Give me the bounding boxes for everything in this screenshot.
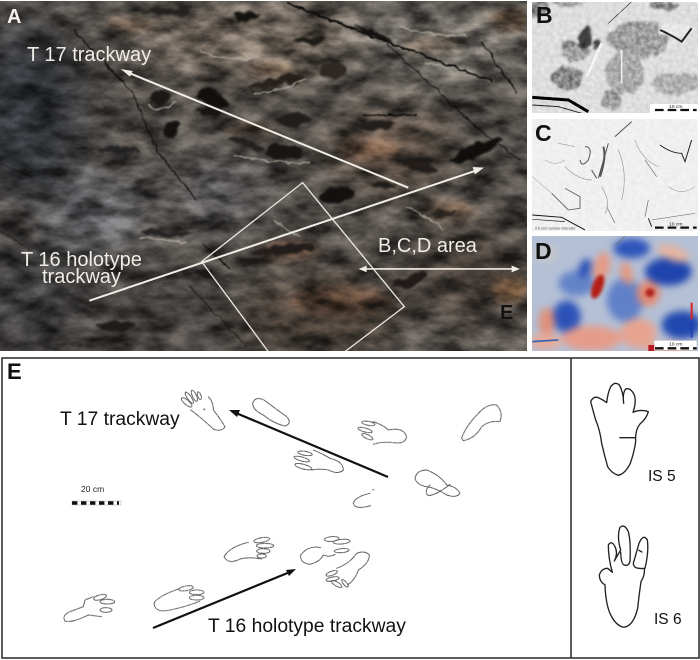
footprint: overlapping pair	[415, 470, 460, 496]
label: T 17 trackway: T 17 trackway	[27, 44, 151, 66]
relief shading	[525, 0, 698, 113]
label: T 16 holotype trackway: T 16 holotype	[21, 249, 142, 271]
relief background	[532, 2, 698, 113]
rock grain texture	[0, 1, 527, 351]
label: A: A	[7, 6, 21, 28]
footprint: T 17 top centre	[357, 420, 407, 444]
arrow: T 16 direction	[153, 569, 296, 628]
arrow: B,C,D area double arrow	[359, 266, 520, 272]
footprint: T 17 first	[180, 389, 225, 430]
label: T 17 trackway map: T 17 trackway	[60, 409, 180, 430]
footprint: T 16 lower middle	[154, 585, 204, 611]
arrow: T 17 direction	[229, 410, 388, 477]
footprint: T 16 lower right	[325, 552, 369, 589]
scale bar and contour note	[535, 222, 697, 230]
footprint: T 17 centre	[293, 450, 343, 472]
label: IS 6: IS 6	[654, 611, 682, 628]
footprint: partial heel	[353, 489, 374, 507]
rock base tone	[0, 1, 527, 351]
label: IS 5: IS 5	[648, 468, 676, 485]
label: E: E	[7, 359, 22, 384]
footprints: right half of trackway map	[293, 405, 501, 589]
label: B,C,D area: B,C,D area	[378, 235, 478, 257]
footprint: T 17 top right	[462, 405, 501, 441]
label: T 16 holotype trackway	[21, 249, 142, 288]
panel D: colour depth map	[528, 236, 700, 354]
rock light and shadow areas	[0, 4, 530, 360]
panel A: rock surface photograph	[0, 1, 530, 360]
scale bar: 20 cm: 20 cm	[81, 484, 104, 494]
footprint outline: IS 5	[591, 383, 648, 475]
contour grain	[532, 119, 698, 231]
label: D: D	[535, 238, 552, 264]
footprint: T 16 upper right	[301, 536, 350, 564]
scale bar and contour note: 10 cm	[669, 221, 683, 227]
depth map background	[532, 236, 698, 351]
footprint: T 16 lower left	[64, 593, 115, 621]
label: T 16 holotype trackway map: T 16 holotype trackway	[208, 616, 406, 637]
pale rims	[140, 27, 467, 243]
footprint: T 17 sole	[253, 398, 289, 426]
rust patches	[105, 10, 530, 314]
label: E on photo: E	[500, 302, 513, 324]
study area rectangle	[202, 183, 404, 352]
arrow: T 17 trackway in photo	[121, 69, 408, 188]
footprint: T 16 upper left	[224, 536, 274, 561]
scale bar: 20 cm	[72, 484, 121, 505]
depth map blobs	[528, 237, 700, 354]
contour background	[532, 119, 698, 231]
panel E: trackway map frame	[2, 358, 699, 658]
relief grain	[532, 2, 698, 113]
scale bar and contour note: 0.5 mm contour intervals	[535, 226, 575, 230]
scale bar: 10 cm	[669, 104, 683, 110]
contour lines	[532, 122, 695, 230]
colour legend and scale bar	[654, 303, 697, 350]
panel B: shaded relief	[525, 0, 698, 113]
label: B: B	[536, 2, 553, 28]
footprint depressions	[97, 8, 505, 331]
cracks	[0, 3, 520, 347]
arrow: T 16 trackway in photo	[89, 167, 484, 301]
footprints: left half of trackway map	[64, 389, 289, 621]
panel C: contour relief	[532, 119, 698, 231]
label: T 16 holotype trackway: trackway	[42, 266, 121, 288]
label: C: C	[535, 120, 552, 146]
colour legend and scale bar: 10 cm	[669, 341, 683, 347]
footprint outline: IS 6	[599, 526, 648, 627]
scale bar	[650, 104, 698, 113]
